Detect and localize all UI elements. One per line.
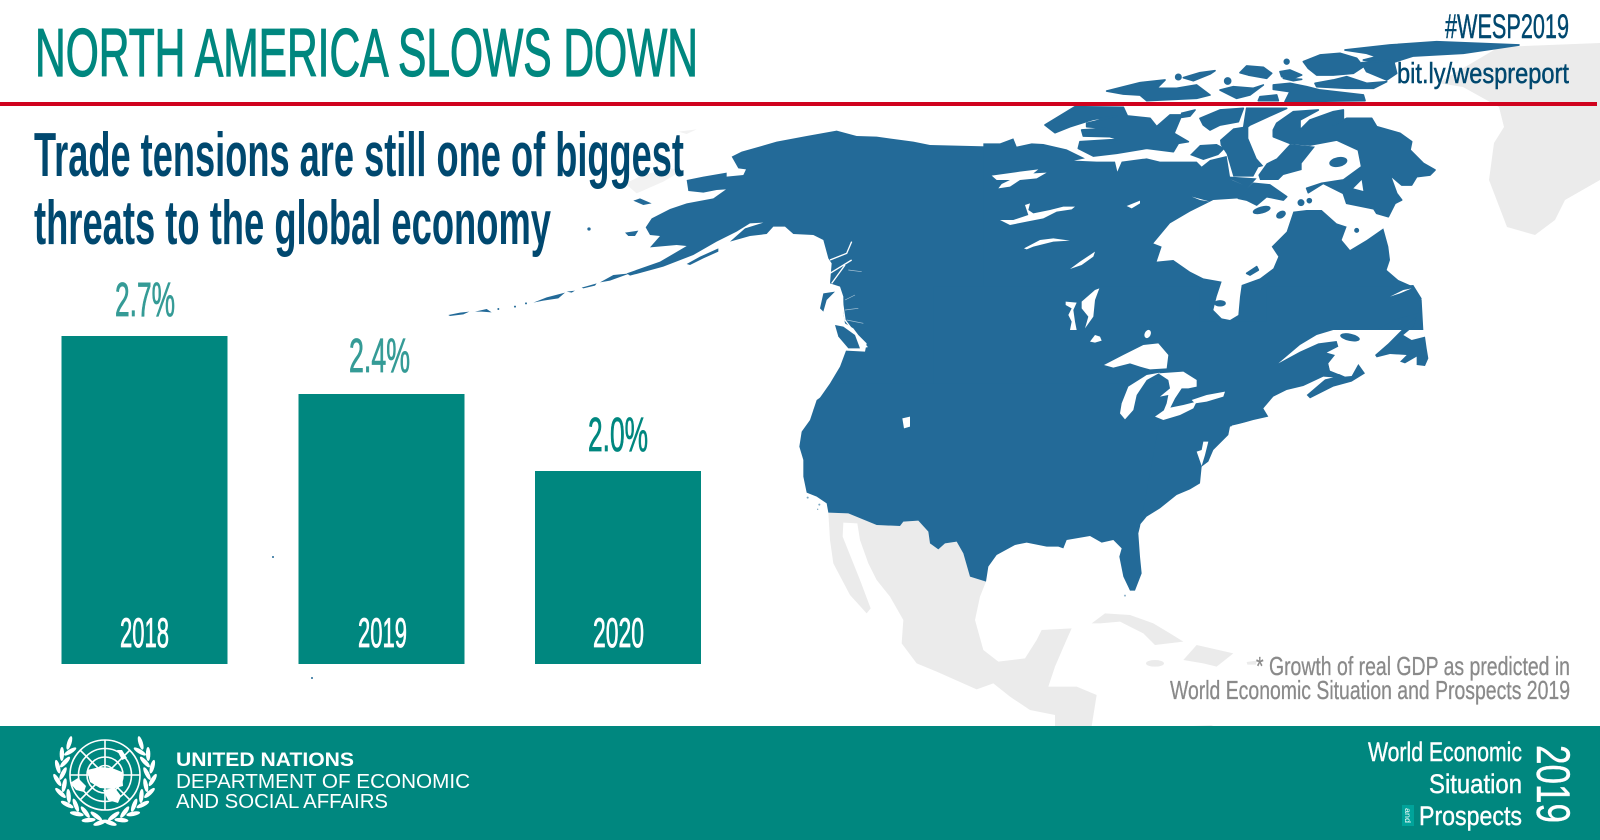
map: northern Canada and Ungava xyxy=(983,126,1423,330)
footer band xyxy=(0,726,1600,840)
map: lakes and inlets (south-east) xyxy=(1066,288,1412,466)
bar: 2018: 2018 xyxy=(120,609,169,656)
report logotype: and xyxy=(1403,808,1412,823)
subheading: Trade tensions are still one of biggest xyxy=(34,121,684,190)
organisation name: AND SOCIAL AFFAIRS xyxy=(176,791,388,813)
footnote xyxy=(1170,651,1570,705)
bar: 2020: 2020 xyxy=(593,609,644,656)
bar: 2019: 2.4% xyxy=(349,330,410,383)
bar chart: GDP growth xyxy=(62,274,701,664)
title: NORTH AMERICA SLOWS DOWN xyxy=(35,15,698,91)
report logotype: Prospects xyxy=(1419,801,1522,831)
map: lakes and bays (north) xyxy=(992,169,1243,269)
report logotype: Situation xyxy=(1429,769,1522,799)
organisation name: DEPARTMENT OF ECONOMIC xyxy=(176,771,470,793)
bar: 2020 xyxy=(535,409,701,664)
map: Pacific fjords and islands xyxy=(820,242,867,350)
bar: 2019: 2019 xyxy=(358,609,407,656)
subheading xyxy=(34,121,684,258)
bar: 2018 xyxy=(62,274,228,664)
hashtag and report link xyxy=(1397,8,1569,90)
icon: United Nations emblem xyxy=(52,736,158,827)
bar: 2020: 2.0% xyxy=(588,409,648,462)
organisation name: UNITED NATIONS xyxy=(176,750,354,771)
bar: 2018: 2.7% xyxy=(115,274,175,327)
map: southern United States xyxy=(799,383,1167,597)
map: Arctic islands xyxy=(1045,42,1519,306)
red divider line xyxy=(0,102,1597,106)
map: North America xyxy=(272,42,1600,727)
map: Great Salt Lake xyxy=(902,417,910,428)
map: grey neighbouring land xyxy=(625,43,1600,727)
report logotype xyxy=(1368,737,1580,831)
map: Alaska and western Canada xyxy=(448,131,997,410)
map: eastern Canada and United States xyxy=(933,285,1428,527)
bar: 2019 xyxy=(298,330,464,664)
report logotype: World Economic xyxy=(1368,737,1522,767)
subheading: threats to the global economy xyxy=(34,189,551,258)
organisation name xyxy=(176,750,470,813)
